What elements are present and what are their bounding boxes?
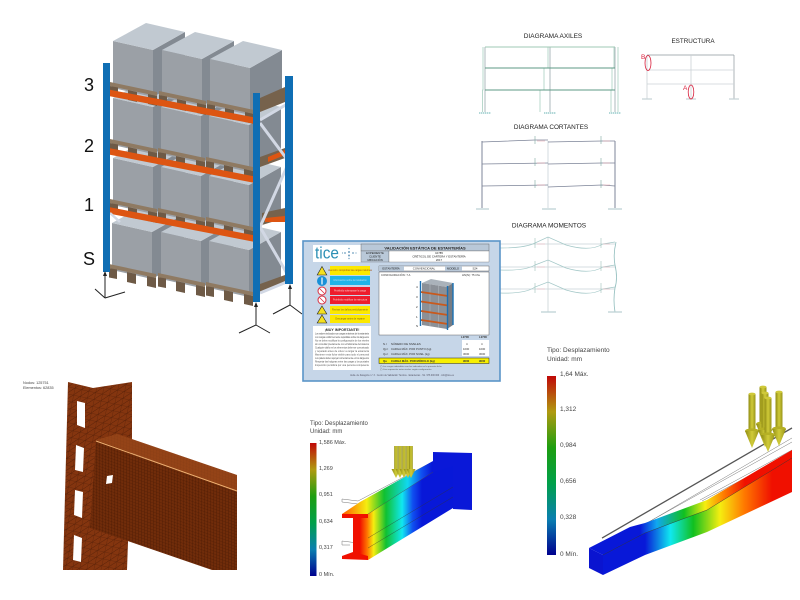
sub header bar: CONVENCIONAL (413, 267, 436, 271)
FEM result: I beam (310, 421, 472, 578)
load table: (*) Las cargas admisibles son las indicadas en la presente ficha (380, 365, 442, 368)
configuration drawing: 1 (416, 315, 418, 319)
callout A: A (683, 85, 688, 92)
fixed end (433, 452, 472, 510)
warning: forbidden two (318, 296, 370, 304)
load table: 4 (481, 342, 483, 346)
text block: important notes: con cargas uniformemente repartidas sobre los largueros (315, 336, 370, 339)
scale values (319, 440, 347, 578)
mesh statistics: Nodos: 125751 (23, 381, 49, 385)
diagram: estructura (641, 38, 739, 99)
load table: CARGA MÁX. POR NIVEL (kg) (391, 352, 430, 356)
front left upright (103, 63, 110, 272)
sub header bar (379, 266, 489, 271)
mesh statistics: Elementos: 62835 (23, 386, 54, 390)
text block: important notes: Los valores indicados son cargas máximas de la estantería (315, 332, 370, 336)
legend heading: Unidad: mm (547, 356, 582, 363)
rear orange beams (268, 150, 285, 162)
scale values (560, 371, 589, 558)
rear side pallets (260, 87, 285, 112)
legend heading: Unidad: mm (310, 429, 342, 435)
callout B: B (641, 54, 645, 61)
deformed web and body (353, 466, 453, 560)
scale values: 0,984 (560, 442, 577, 449)
undeformed lines (602, 428, 792, 538)
frame bracing (260, 103, 289, 293)
level labels: 1 (84, 195, 94, 215)
axis icons (95, 271, 302, 333)
text block: important notes (313, 326, 371, 370)
header table: 2017 (436, 258, 443, 262)
diagram: axiles (479, 33, 621, 113)
diagram: estructura: ESTRUCTURA (671, 38, 715, 45)
load table: 9000 (463, 359, 470, 363)
load table: NÚMERO DE NIVELES (391, 341, 421, 346)
row S boxes (109, 205, 281, 306)
load table: CARGA MÁX. POR MÓDULO (kg) (391, 358, 435, 363)
load table: CARGA MÁX. POR PUNTO (kg) (391, 347, 431, 351)
load table: Qp I (383, 347, 389, 351)
logo (313, 244, 361, 262)
rear right upright front portion (285, 76, 293, 284)
mini rack (420, 279, 453, 330)
legend heading: Tipo: Desplazamiento (310, 421, 368, 427)
beam end face (589, 548, 603, 575)
level labels: 2 (84, 136, 94, 156)
load table: Qu I (383, 352, 389, 356)
load table: (*) Con separación entre niveles según configuración (380, 368, 432, 371)
load arrows (745, 386, 786, 452)
warning: general triangle (317, 266, 373, 275)
text block: important notes: Respetar las holguras entre las cargas y los puntales (315, 360, 370, 364)
front right upright (253, 93, 260, 302)
level labels: S (83, 249, 95, 269)
load table: 1000 (463, 347, 470, 351)
load table: Qu (383, 359, 387, 363)
beam mesh (90, 440, 237, 570)
level labels: 3 (84, 75, 94, 95)
configuration drawing: HN(N): 75 trfw (462, 273, 481, 277)
sub header bar: S24 (473, 267, 478, 271)
scale values: 0,634 (319, 519, 333, 525)
scale values: 0,951 (319, 492, 333, 498)
scale values: 0,656 (560, 478, 577, 485)
configuration drawing: CONFIGURACIÓN: 7 A (381, 272, 411, 277)
text block: important notes: ¡MUY IMPORTANTE! (325, 328, 359, 332)
level 3 boxes (110, 23, 282, 124)
configuration drawing: 4 (416, 285, 418, 289)
configuration drawing (379, 272, 489, 335)
load table: 1000 (479, 347, 486, 351)
level 1 boxes (110, 140, 281, 241)
warning: triangle three (317, 306, 370, 314)
load table (379, 335, 489, 371)
warning: triangle four: Descargar antes de reparar (335, 318, 365, 320)
diagram: cortantes (476, 124, 622, 209)
beam top face (589, 450, 792, 555)
rear right upright (285, 76, 293, 284)
scale values: 1,64 Máx. (560, 371, 589, 378)
load table: L2700 (479, 335, 487, 339)
scale values: 0 Mín. (560, 551, 578, 558)
header table: 10785 (435, 251, 443, 255)
header table (361, 244, 489, 262)
scale values: 1,586 Máx. (319, 440, 347, 446)
text block: important notes: Cualquier daño en los elementos debe ser comunicado (315, 346, 370, 350)
load table: 3000 (479, 352, 486, 356)
bottom flange front (342, 552, 368, 560)
warning: forbidden two: Prohibido modificar la estructura (333, 298, 368, 302)
logo: tice (315, 244, 339, 262)
warning: information (317, 276, 370, 286)
header table: EXPEDIENTE (366, 251, 384, 255)
scale values: 0 Mín. (319, 572, 335, 578)
warning: triangle three: Revisar los daños periódicamente (332, 308, 369, 312)
footer note: Avda. de Zaragoza n.º 3 · Centro de Validación Técnica · Estanterías · Tel. 976 000 000 · info@tice.es (350, 373, 455, 377)
scale values: 0,317 (319, 545, 333, 551)
scale values: 0,328 (560, 514, 577, 521)
FEM result: deflected beam (547, 347, 792, 575)
legend heading (310, 421, 368, 435)
load table: 3000 (463, 352, 470, 356)
warning: information: Información sobre la instalación (333, 279, 367, 282)
text block: important notes: Mantener esta ficha visible para todo el personal (315, 354, 369, 356)
colour scale (310, 443, 316, 576)
header table: VALIDACIÓN ESTÁTICA DE ESTANTERÍAS (384, 246, 466, 251)
load table: 4 (466, 342, 468, 346)
upright holes (73, 401, 85, 562)
upright mesh (63, 382, 132, 570)
colour scale (547, 376, 556, 555)
warning: forbidden one: Prohibido sobrepasar la carga (334, 290, 367, 292)
top flange front (342, 514, 368, 518)
text block: important notes: No se debe modificar la configuración de los niveles (315, 340, 370, 342)
level 2 beam (106, 148, 255, 183)
load table: N.I (383, 342, 387, 346)
load table: L2700 (461, 335, 469, 339)
level labels (83, 75, 95, 269)
configuration drawing: 2 (416, 305, 418, 309)
warning: triangle four (317, 315, 370, 323)
mesh model: beam connection (23, 381, 237, 570)
load table: 9000 (479, 359, 486, 363)
configuration drawing: 3 (416, 295, 418, 299)
undeformed outline (342, 462, 432, 545)
3D pallet rack illustration (103, 23, 293, 306)
text block: important notes: y reparado antes de volver a cargar la estantería (315, 350, 370, 353)
sub header bar: MODELO (447, 267, 460, 271)
diagram: momentos (500, 222, 622, 312)
beam side face (603, 458, 792, 575)
warning: general triangle: Atención: comprobar las cargas máximas (328, 269, 373, 272)
panel: validation sheet (303, 241, 500, 381)
level 1 beam (106, 206, 255, 242)
header table: CLIENTE (369, 254, 381, 258)
diagram: cortantes: DIAGRAMA CORTANTES (514, 124, 588, 131)
text block: important notes: Los palets deben apoyar correctamente en los largueros (315, 357, 370, 360)
scale values: 1,312 (560, 406, 577, 413)
diagram: momentos: DIAGRAMA MOMENTOS (512, 222, 587, 230)
text block: important notes: Inspección periódica por una persona competente (315, 364, 370, 367)
warning: forbidden one (318, 287, 370, 295)
configuration drawing: S (416, 324, 418, 328)
text block: important notes: sin consultar previamente con el fabricante del sistema (315, 343, 370, 346)
top flange (342, 461, 433, 514)
scale values: 1,269 (319, 466, 333, 472)
diagram: axiles: DIAGRAMA AXILES (524, 33, 583, 40)
level 3 beam (106, 89, 255, 124)
mesh statistics (23, 381, 54, 390)
level 2 boxes (110, 80, 281, 181)
header table: CRÉTICOL DE CARTERA Y ESTANTERÍA (412, 254, 466, 258)
legend heading (547, 347, 610, 363)
load arrows (392, 446, 416, 478)
legend heading: Tipo: Desplazamiento (547, 347, 610, 354)
header table: UBICACIÓN (367, 257, 383, 262)
sub header bar: ESTANTERÍA (382, 267, 400, 271)
